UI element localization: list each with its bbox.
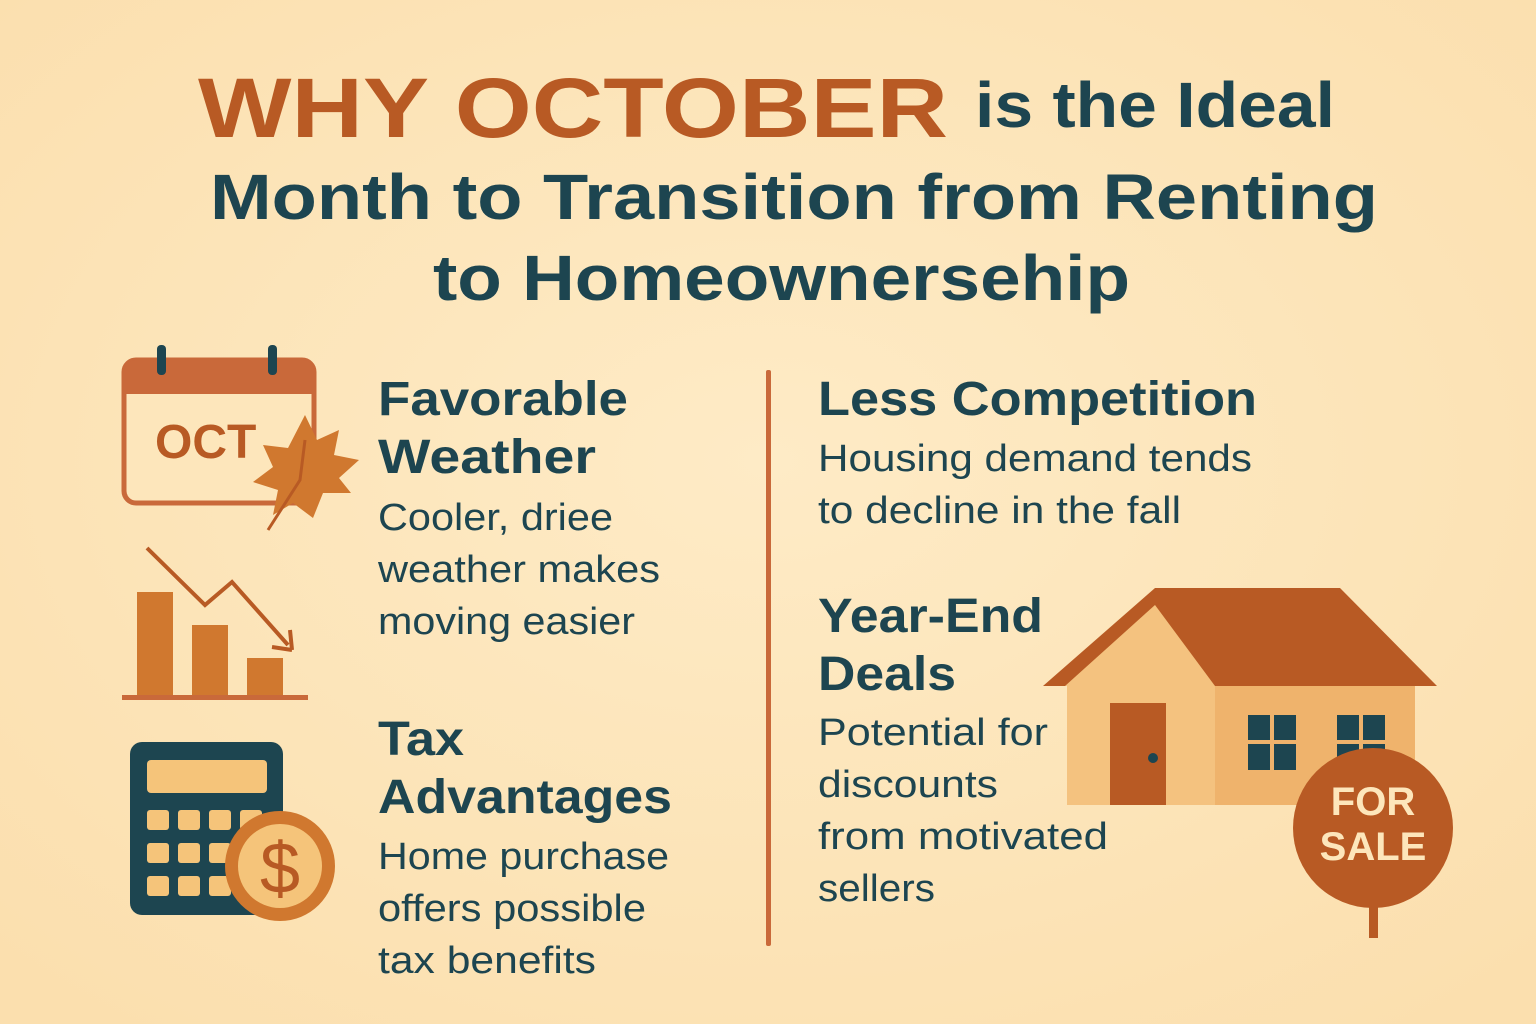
title: Month to Transition from Renting xyxy=(210,161,1378,233)
text: year-end deals xyxy=(818,590,1108,910)
title: to Homeownersehip xyxy=(433,242,1130,314)
text: favorable weather: Favorable xyxy=(378,373,628,426)
text: favorable weather: Cooler, driee xyxy=(378,497,613,539)
text: tax advantages: Advantages xyxy=(378,771,672,824)
text: year-end deals: sellers xyxy=(818,868,935,910)
icon: calendar with leaf: OCT xyxy=(155,416,256,469)
icon: calculator with coin: $ xyxy=(260,829,300,909)
text: tax advantages: Home purchase xyxy=(378,836,669,878)
text: less competition xyxy=(818,373,1257,532)
text: tax advantages: tax benefits xyxy=(378,940,596,982)
text: less competition: to decline in the fall xyxy=(818,490,1181,532)
icon: house with for sale sign: SALE xyxy=(1320,825,1426,869)
title: WHY OCTOBER xyxy=(198,61,948,155)
icon: house with for sale sign xyxy=(1043,588,1453,938)
text: favorable weather: Weather xyxy=(378,431,596,484)
text: year-end deals: discounts xyxy=(818,764,998,806)
text: year-end deals: from motivated xyxy=(818,816,1108,858)
text: favorable weather xyxy=(377,373,660,643)
icon: calendar with leaf xyxy=(124,345,359,530)
text: less competition: Housing demand tends xyxy=(818,438,1252,480)
text: favorable weather: weather makes xyxy=(377,549,660,591)
text: tax advantages xyxy=(378,713,672,982)
text: favorable weather: moving easier xyxy=(378,601,635,643)
icon: calculator with coin xyxy=(130,742,335,921)
icon: declining bar chart xyxy=(122,548,308,700)
text: less competition: Less Competition xyxy=(818,373,1257,426)
icon: house with for sale sign: FOR xyxy=(1331,780,1415,824)
divider xyxy=(766,370,771,946)
text: tax advantages: offers possible xyxy=(378,888,646,930)
text: year-end deals: Year-End xyxy=(818,590,1043,643)
title: is the Ideal xyxy=(975,69,1335,141)
text: year-end deals: Potential for xyxy=(818,712,1048,754)
text: tax advantages: Tax xyxy=(378,713,464,766)
title xyxy=(198,61,1378,314)
text: year-end deals: Deals xyxy=(818,648,956,701)
